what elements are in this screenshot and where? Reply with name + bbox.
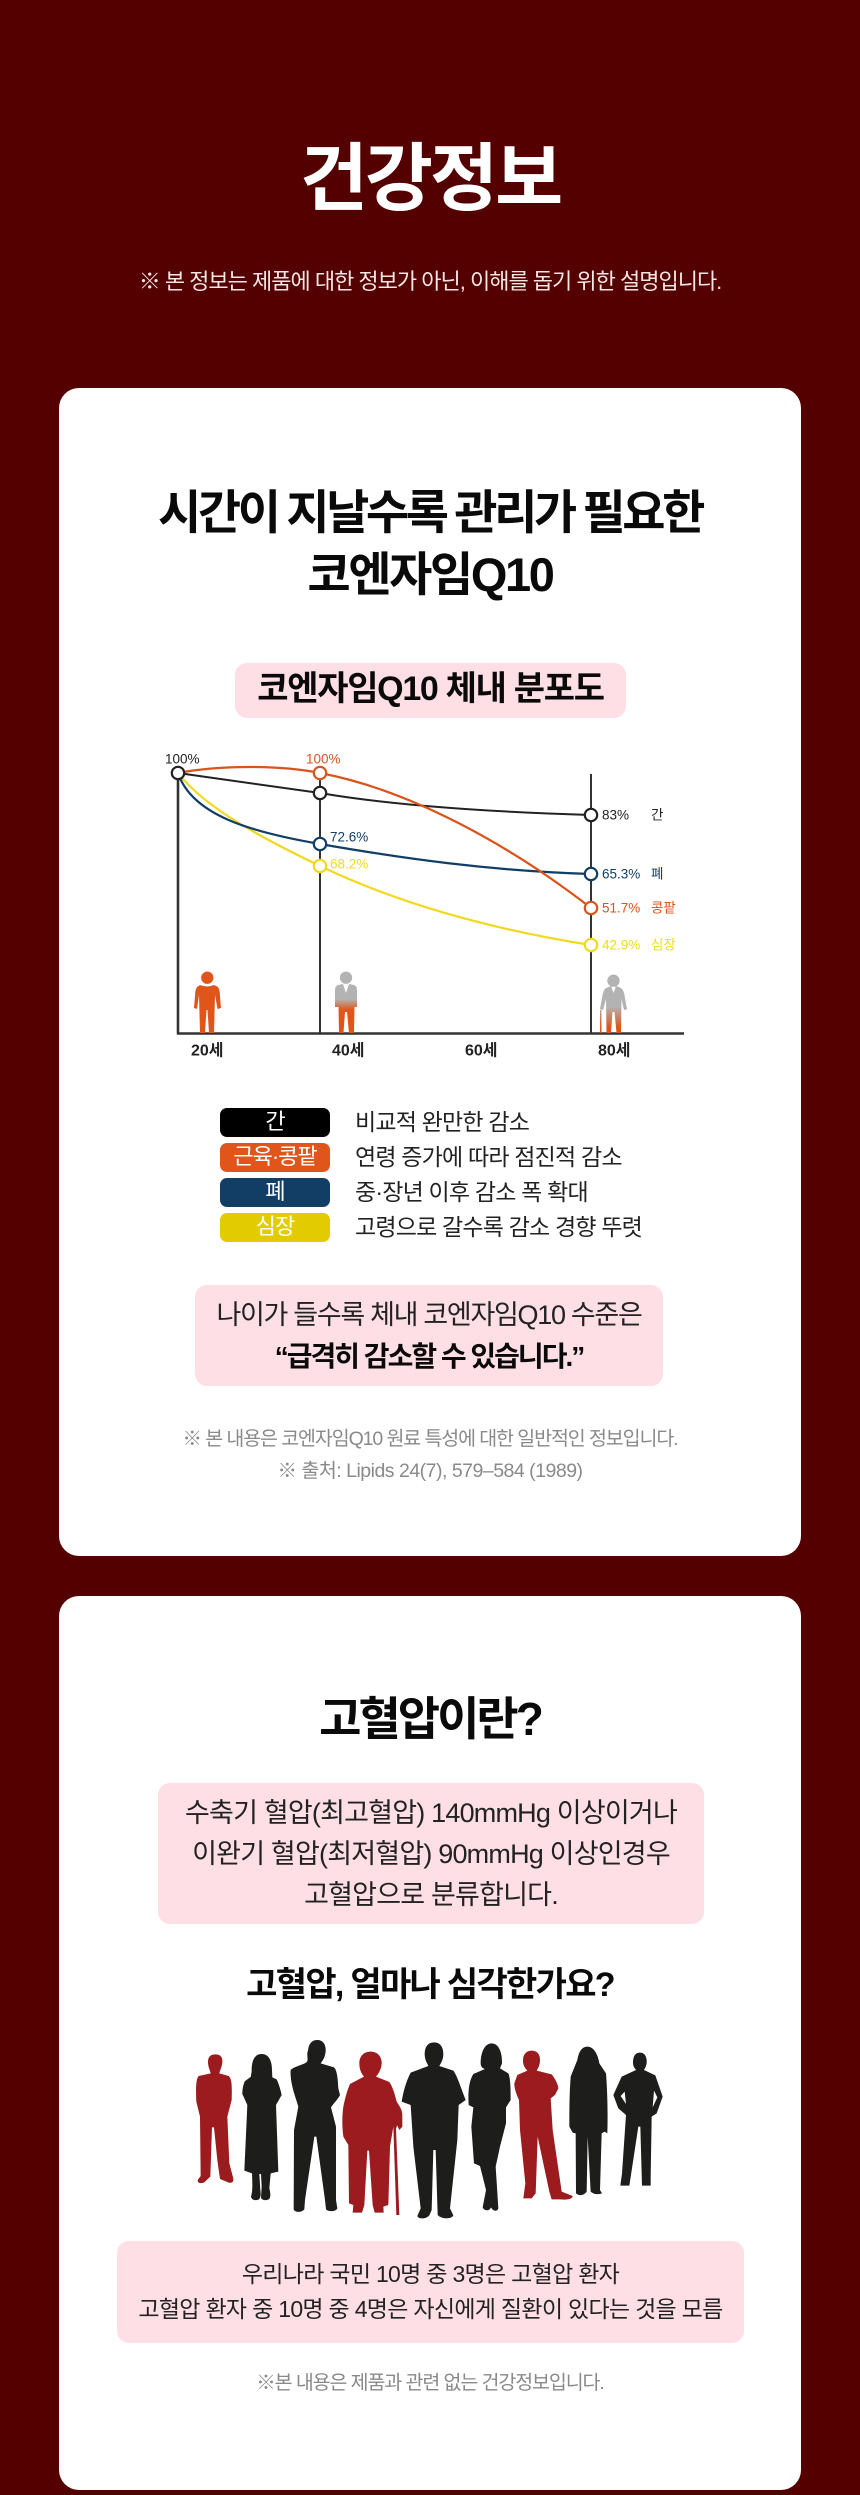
age axis labels: 20세 (191, 1042, 224, 1060)
legend row: heart (220, 1213, 642, 1242)
title: 건강정보 (300, 137, 560, 220)
value labels: 100% (306, 752, 341, 766)
definition box: 이완기 혈압(최저혈압) 90mmHg 이상인경우 (192, 1839, 670, 1869)
legend row: muscle and kidney: 연령 증가에 따라 점진적 감소 (355, 1144, 622, 1170)
panel: coenzyme Q10 (59, 388, 801, 1556)
heading: Q10 (158, 486, 704, 601)
legend row: lung (220, 1178, 588, 1207)
value labels: 100% (165, 752, 200, 766)
illustration: people silhouettes (196, 2040, 663, 2218)
value labels: 83% (602, 808, 629, 822)
legend row: liver (220, 1108, 529, 1137)
heading: Q10: 코엔자임Q10 (308, 548, 552, 601)
definition box: 고혈압으로 분류합니다. (304, 1880, 558, 1910)
icon: person aged 20 (194, 972, 221, 1033)
callout: Q10 decline (195, 1285, 663, 1386)
curve: liver (178, 773, 591, 815)
source notes: ※ 본 내용은 코엔자임Q10 원료 특성에 대한 일반적인 정보입니다. (182, 1428, 677, 1450)
value labels: 65.3% (602, 866, 640, 882)
source notes (182, 1428, 677, 1482)
value labels: 72.6% (330, 830, 368, 844)
silhouette: woman in dress (242, 2054, 282, 2200)
legend row: muscle and kidney (220, 1143, 622, 1172)
legend row: lung: 폐 (265, 1179, 285, 1204)
curve: muscle and kidney (178, 767, 591, 908)
callout: Q10 decline: 나이가 들수록 체내 코엔자임Q10 수준은 (216, 1300, 642, 1330)
heading: Q10: 시간이 지날수록 관리가 필요한 (158, 486, 702, 539)
statistics box: 우리나라 국민 10명 중 3명은 고혈압 환자 (242, 2261, 619, 2287)
chart axes (177, 773, 684, 1034)
age axis labels: 80세 (598, 1042, 631, 1060)
legend row: heart: 고령으로 갈수록 감소 경향 뚜렷 (355, 1214, 642, 1240)
subtitle note: ※ 본 정보는 제품에 대한 정보가 아닌, 이해를 돕기 위한 설명입니다. (139, 269, 721, 294)
legend row: liver: 비교적 완만한 감소 (355, 1109, 529, 1135)
value labels: 간 (651, 808, 663, 822)
value labels: 68.2% (330, 856, 368, 872)
age axis labels: 60세 (465, 1042, 498, 1060)
value labels: 51.7% (602, 900, 640, 916)
statistics box (117, 2241, 744, 2343)
value labels: 심장 (651, 938, 676, 952)
callout: Q10 decline: “급격히 감소할 수 있습니다.” (275, 1341, 583, 1372)
chart title pill: 코엔자임Q10 체내 분포도 (257, 670, 604, 708)
statistics box: 고혈압 환자 중 10명 중 4명은 자신에게 질환이 있다는 것을 모름 (138, 2296, 723, 2322)
legend (220, 1108, 642, 1242)
subheading: severity: 고혈압, 얼마나 심각한가요? (246, 1966, 614, 2004)
chart title pill (235, 663, 626, 718)
silhouette: man in short sleeves (402, 2042, 466, 2218)
legend row: liver: 간 (265, 1109, 285, 1134)
silhouette: red man (196, 2054, 233, 2183)
silhouette: red man arms crossed (514, 2051, 573, 2200)
silhouette: old woman with cane (342, 2052, 402, 2215)
value labels: 콩팥 (651, 900, 676, 916)
value labels: 폐 (651, 866, 663, 882)
curve: heart (178, 773, 591, 945)
silhouette: man hands on hips (613, 2053, 663, 2186)
legend row: lung: 중·장년 이후 감소 폭 확대 (355, 1179, 588, 1205)
definition box: 수축기 혈압(최고혈압) 140mmHg 이상이거나 (185, 1798, 677, 1828)
icon: person aged 80 with cane (600, 974, 627, 1033)
icon: person aged 40 (335, 972, 357, 1033)
disclaimer note: ※본 내용은 제품과 관련 없는 건강정보입니다. (256, 2372, 604, 2394)
value labels (165, 752, 676, 952)
value labels: 42.9% (602, 938, 640, 952)
age axis labels: 40세 (332, 1042, 365, 1060)
curve: lung (178, 773, 591, 874)
data points (172, 767, 597, 951)
age axis labels (191, 1042, 631, 1060)
source notes: ※ 출처: Lipids 24(7), 579–584 (1989) (277, 1460, 583, 1482)
legend row: heart: 심장 (256, 1214, 294, 1239)
line chart: Q10 distribution by age (165, 752, 684, 1060)
heading: hypertension: 고혈압이란? (319, 1693, 541, 1745)
panel: hypertension (59, 1596, 801, 2490)
silhouette: woman with bob (468, 2043, 511, 2211)
legend row: muscle and kidney: 근육·콩팥 (233, 1144, 317, 1169)
silhouette: woman with long hair (569, 2047, 608, 2195)
definition box (158, 1783, 704, 1924)
silhouette: tall man (291, 2040, 340, 2212)
